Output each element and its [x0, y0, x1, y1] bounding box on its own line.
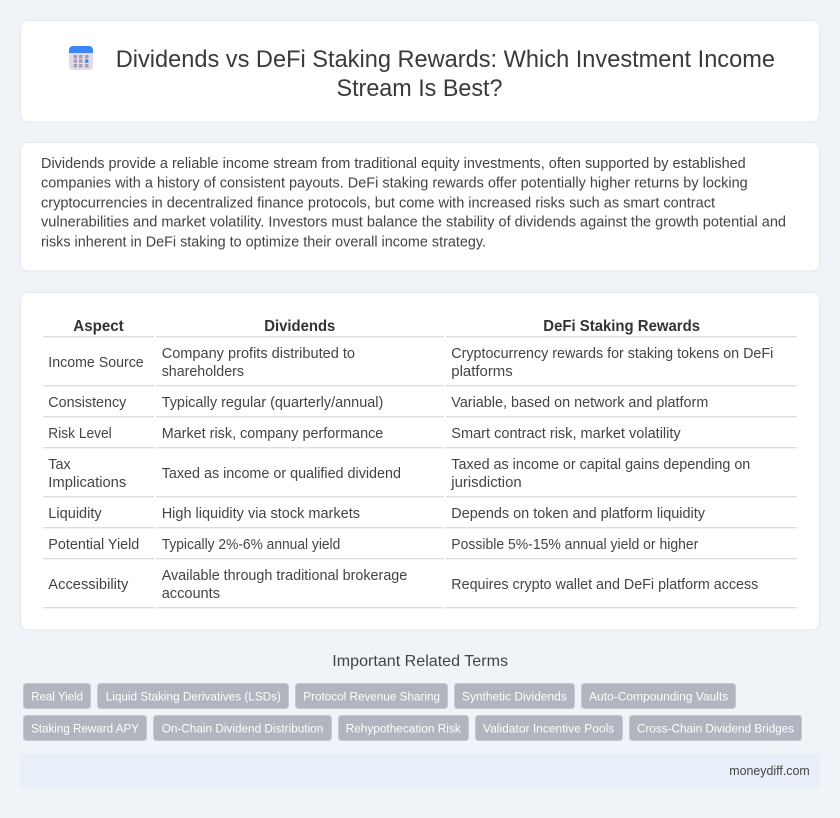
row: risk level: Market risk, company performance	[162, 426, 383, 442]
row: risk level: Risk Level	[48, 426, 112, 442]
row: accessibility: Accessibility	[48, 577, 129, 593]
tag: Auto-Compounding Vaults	[582, 684, 736, 708]
row: consistency: Consistency	[48, 395, 127, 411]
row: income source: shareholders	[162, 364, 244, 380]
row: consistency	[48, 395, 708, 411]
row: potential yield: Potential Yield	[48, 537, 139, 553]
title	[116, 46, 775, 102]
tag: Validator Incentive Pools: Validator Incentive Pools	[483, 721, 614, 735]
row: accessibility: Requires crypto wallet and DeFi platform access	[451, 577, 758, 593]
footer: moneydiff.com	[729, 763, 810, 778]
row: liquidity: High liquidity via stock markets	[162, 506, 360, 522]
row: potential yield	[48, 537, 698, 553]
tag: Protocol Revenue Sharing: Protocol Revenue Sharing	[303, 689, 440, 703]
row: income source	[48, 346, 773, 380]
row: tax implications: Taxed as income or capital gains depending on	[451, 457, 750, 473]
tag: Protocol Revenue Sharing	[296, 684, 448, 708]
heading: related terms: Important Related Terms	[332, 653, 508, 670]
row: potential yield: Typically 2%-6% annual yield	[162, 537, 340, 553]
table header row: Dividends	[264, 318, 335, 335]
icon: calendar	[69, 46, 93, 70]
row: tax implications: Taxed as income or qualified dividend	[162, 466, 401, 482]
tag: Auto-Compounding Vaults: Auto-Compounding Vaults	[589, 689, 728, 703]
title: Stream Is Best?	[336, 75, 502, 102]
row: tax implications	[48, 457, 750, 491]
row: accessibility: accounts	[162, 586, 220, 602]
tag: Rehypothecation Risk: Rehypothecation Risk	[346, 721, 462, 735]
tag: Liquid Staking Derivatives	[98, 684, 288, 708]
row: accessibility	[48, 568, 758, 602]
summary text: risks inherent in DeFi staking to optimize their overall income strategy.	[41, 234, 486, 250]
row: accessibility: Available through traditional brokerage	[162, 568, 407, 584]
tag: Real Yield	[24, 684, 90, 708]
row: income source: Company profits distributed to	[162, 346, 355, 362]
row: risk level: Smart contract risk, market volatility	[451, 426, 681, 442]
tag: Cross-Chain Dividend Bridges	[630, 716, 802, 740]
row: income source: Income Source	[48, 355, 144, 371]
panel: comparison table	[20, 292, 820, 630]
row: income source: Cryptocurrency rewards for staking tokens on DeFi	[451, 346, 773, 362]
tag: Liquid Staking Derivatives: Liquid Staking Derivatives (LSDs)	[106, 689, 281, 703]
title: Dividends vs DeFi Staking Rewards: Which Investment Income	[116, 46, 775, 73]
table header row: DeFi Staking Rewards	[543, 318, 700, 335]
tag: Rehypothecation Risk	[338, 716, 468, 740]
table header row: Aspect	[73, 318, 124, 335]
panel: summary paragraph	[20, 142, 820, 271]
tag: Cross-Chain Dividend Bridges: Cross-Chain Dividend Bridges	[637, 721, 794, 735]
summary text: cryptocurrencies in decentralized finance protocols, but come with increased risks such as smart contract	[41, 196, 715, 212]
summary text: Dividends provide a reliable income stream from traditional equity investments, often supported by established	[41, 156, 746, 172]
summary text: vulnerabilities and market volatility. Investors must balance the stability of dividends against the growth potential and	[41, 214, 786, 230]
tag: Real Yield: Real Yield	[31, 689, 83, 703]
row: tax implications: Tax	[48, 457, 71, 473]
row: liquidity: Depends on token and platform liquidity	[451, 506, 706, 522]
table header row	[73, 318, 700, 335]
footer	[20, 754, 820, 788]
panel: title header	[20, 20, 820, 122]
summary text: companies with a history of consistent payouts. DeFi staking rewards offer potentially higher returns by locking	[41, 176, 748, 192]
tag: On-Chain Dividend Distribution	[154, 716, 332, 740]
row: consistency: Variable, based on network and platform	[451, 395, 708, 411]
tag: On-Chain Dividend Distribution: On-Chain Dividend Distribution	[162, 721, 323, 735]
tag: Synthetic Dividends: Synthetic Dividends	[462, 689, 567, 703]
tag: Staking Reward APY	[24, 716, 146, 740]
row: tax implications: jurisdiction	[450, 475, 522, 491]
row: liquidity	[48, 506, 706, 522]
row: risk level	[48, 426, 681, 442]
row: income source: platforms	[451, 364, 513, 380]
summary text	[41, 156, 786, 250]
tag: Staking Reward APY: Staking Reward APY	[31, 721, 139, 735]
row: tax implications: Implications	[48, 475, 126, 491]
tag: Synthetic Dividends	[454, 684, 574, 708]
row: liquidity: Liquidity	[48, 506, 102, 522]
tag: Validator Incentive Pools	[476, 716, 622, 740]
panel: related term tags	[24, 684, 802, 740]
row: consistency: Typically regular (quarterly/annual)	[162, 395, 383, 411]
row: potential yield: Possible 5%-15% annual yield or higher	[451, 537, 698, 553]
